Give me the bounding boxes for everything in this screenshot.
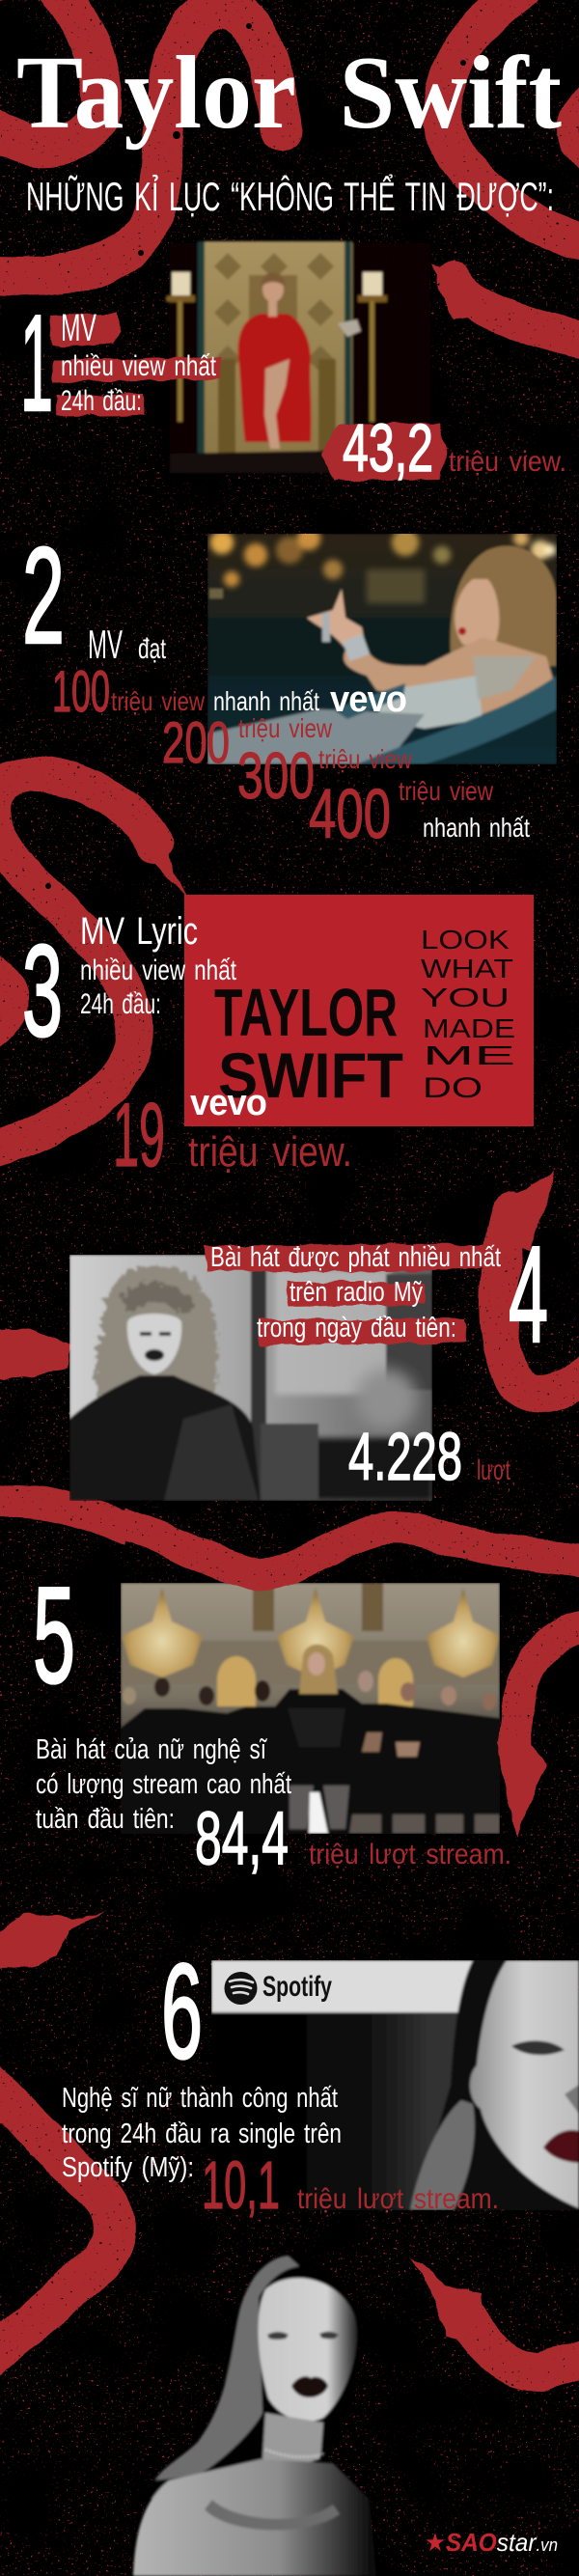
record 4: 4.228 bbox=[348, 1419, 462, 1494]
panel: lyric video cover: SWIFT bbox=[218, 1039, 403, 1111]
record 3: 19 bbox=[113, 1084, 165, 1185]
record 2 bbox=[22, 519, 530, 853]
record 2: vevo bbox=[330, 679, 406, 720]
record 1: triệu view. bbox=[449, 446, 566, 478]
record 1: nhiều view nhất bbox=[61, 350, 216, 382]
record 6: triệu lượt stream. bbox=[297, 2183, 499, 2215]
record 3: vevo bbox=[190, 1083, 266, 1123]
record 1: 43,2 bbox=[343, 410, 433, 485]
photo: black and white portrait bbox=[69, 1255, 432, 1501]
panel: lyric video cover: ME bbox=[423, 1040, 515, 1070]
record 6: trong 24h đầu ra single trên bbox=[62, 2119, 342, 2149]
record 2: nhanh nhất bbox=[423, 813, 530, 843]
photo: dancers in the ballroom bbox=[121, 1583, 500, 1834]
photo: bottom portrait of Taylor bbox=[133, 2256, 376, 2576]
panel: lyric video cover: MADE bbox=[423, 1013, 515, 1043]
record 5: triệu lượt stream. bbox=[309, 1839, 511, 1870]
record 5 bbox=[33, 1559, 511, 1880]
record 2: 300 bbox=[237, 739, 315, 813]
record 2: triệu view bbox=[399, 776, 494, 806]
record 4: Bài hát được phát nhiều nhất bbox=[210, 1242, 501, 1273]
record 6: 10,1 bbox=[202, 2147, 280, 2223]
icon: Spotify logo: Spotify bbox=[262, 1971, 332, 2003]
record 1: 24h đầu: bbox=[61, 385, 142, 417]
record 5: có lượng stream cao nhất bbox=[36, 1769, 291, 1800]
panel: lyric video cover: YOU bbox=[421, 983, 510, 1012]
record 2: nhanh nhất bbox=[213, 686, 319, 716]
panel: lyric video cover: LOOK bbox=[421, 925, 510, 955]
record 3 bbox=[22, 910, 352, 1185]
icon: Spotify logo bbox=[224, 1971, 332, 2005]
photo: Taylor on throne bbox=[166, 241, 430, 473]
record 1: 1 bbox=[20, 287, 53, 440]
record 4: trong ngày đầu tiên: bbox=[257, 1313, 456, 1343]
record 5: Bài hát của nữ nghệ sĩ bbox=[36, 1734, 267, 1765]
record 4: trên radio Mỹ bbox=[290, 1277, 423, 1308]
panel: lyric video cover: TAYLOR bbox=[214, 975, 398, 1050]
record 3: 3 bbox=[22, 918, 63, 1064]
snake head over dancers photo bbox=[496, 1742, 546, 1839]
record 2: triệu view bbox=[238, 713, 333, 743]
record 2: MV bbox=[88, 622, 123, 667]
photo: Spotify close-up bbox=[211, 1960, 579, 2210]
record 3: nhiều view nhất bbox=[80, 955, 236, 986]
record 2: 100 bbox=[52, 659, 110, 724]
record 3: 24h đầu: bbox=[80, 988, 161, 1020]
record 5: 5 bbox=[33, 1559, 75, 1712]
panel: lyric video cover: DO bbox=[423, 1072, 482, 1104]
record 5: 84,4 bbox=[195, 1795, 289, 1880]
logo: SAOstar.vn: ★SAOstar.vn bbox=[425, 2528, 558, 2557]
record 2: đạt bbox=[138, 633, 166, 665]
record 2: 200 bbox=[162, 710, 230, 775]
record 3: triệu view. bbox=[188, 1128, 352, 1176]
panel: lyric video cover: WHAT bbox=[421, 954, 513, 983]
record 2: 400 bbox=[309, 776, 391, 853]
record 6 bbox=[62, 1935, 499, 2223]
photo: Taylor in bathtub bbox=[207, 527, 557, 764]
snake heads bbox=[0, 263, 554, 2341]
record 1: MV bbox=[61, 307, 96, 349]
record 3: MV Lyric bbox=[80, 910, 198, 953]
snakes in front of photos bbox=[121, 1523, 579, 1747]
record 6: 6 bbox=[161, 1935, 203, 2087]
record 1 bbox=[20, 287, 566, 485]
large ink droplets bbox=[45, 23, 553, 1209]
record 4: lượt bbox=[477, 1454, 510, 1486]
record 2: triệu view bbox=[111, 686, 206, 716]
record 6: Nghệ sĩ nữ thành công nhất bbox=[62, 2083, 338, 2114]
record 4 bbox=[205, 1218, 548, 1494]
record 5: tuần đầu tiên: bbox=[36, 1804, 175, 1835]
panel: lyric video cover bbox=[184, 895, 534, 1126]
record 2: 2 bbox=[22, 519, 65, 673]
title: Taylor Swift bbox=[16, 36, 562, 151]
record 2: triệu view bbox=[318, 744, 413, 774]
record 6: Spotify (Mỹ): bbox=[62, 2152, 194, 2183]
